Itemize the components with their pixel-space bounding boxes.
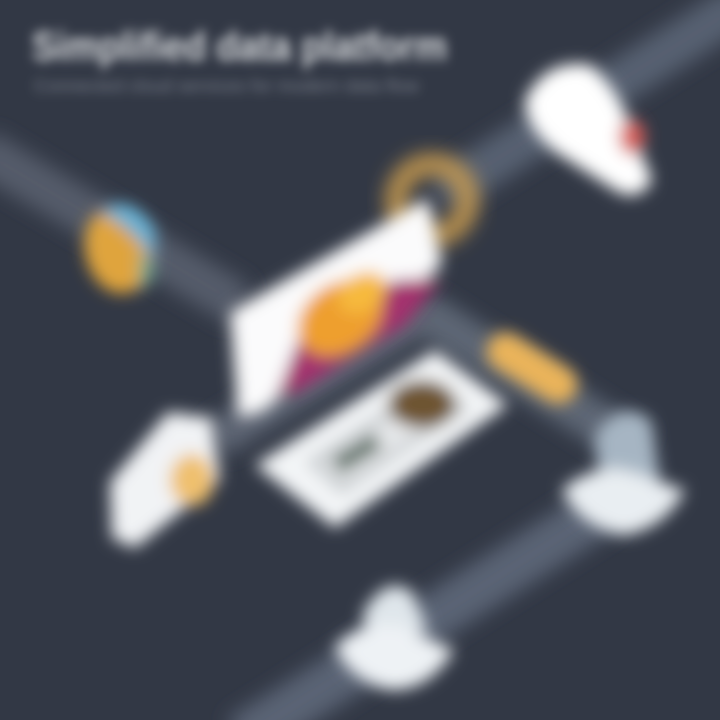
brown badge [388,380,456,428]
icon: bottom cloud [335,586,454,690]
title: Simplified data platform [32,23,447,69]
icon: orange ring [396,164,468,236]
icon: right cloud [562,412,685,535]
green detail [331,433,383,474]
central panel [230,198,442,418]
icon: top right cloud [525,64,652,195]
card [255,350,508,528]
icon: left colour disc [77,200,159,300]
orange capsule [480,325,584,411]
magenta wedge [276,278,442,398]
card inner screen [305,380,470,495]
icon: lower left document [110,412,220,548]
orange blob [283,264,397,372]
panel sheet [230,198,442,418]
subtitle: Connected cloud services for modern data flow [34,76,420,96]
title [32,23,447,96]
